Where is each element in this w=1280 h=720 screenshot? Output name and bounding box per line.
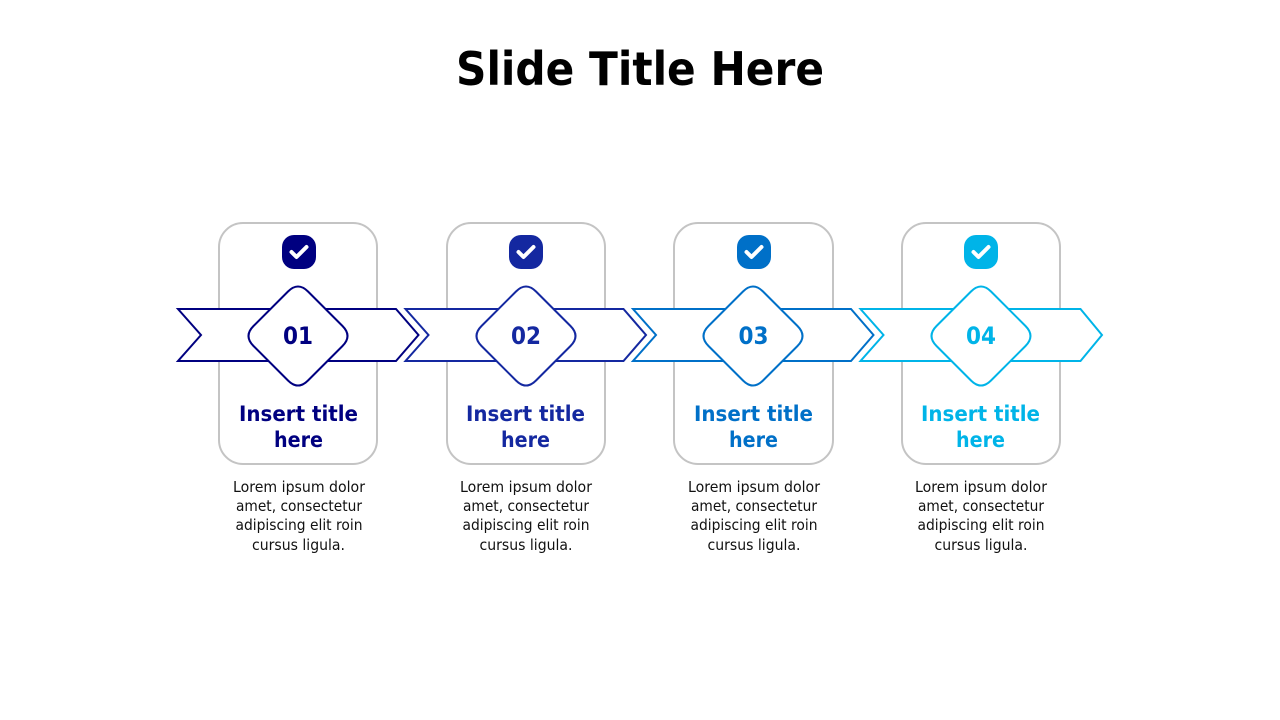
diamond 2 — [476, 286, 576, 386]
body text 1: cursus ligula. — [252, 536, 345, 554]
step 3 group — [688, 235, 821, 554]
body text 2: cursus ligula. — [480, 536, 572, 554]
icon: check badge 4 — [964, 235, 998, 269]
panel: card 4 outline — [902, 223, 1060, 464]
body text 3: amet, consectetur — [691, 497, 818, 515]
body text 2: amet, consectetur — [463, 497, 590, 515]
panel: card 2 outline — [447, 223, 605, 464]
icon: check badge 1 — [282, 235, 316, 269]
diamond 4 — [932, 286, 1030, 386]
title: Slide Title Here — [456, 42, 824, 96]
heading 2: here — [501, 428, 550, 452]
arrow 3 — [633, 309, 874, 361]
body text 3: cursus ligula. — [708, 536, 800, 554]
icon: check badge 2 — [509, 235, 543, 269]
arrow 2 — [406, 309, 646, 361]
panel: card 3 outline — [674, 223, 833, 464]
heading 3: here — [729, 428, 778, 452]
heading 4 — [921, 402, 1040, 452]
heading 2 — [466, 402, 585, 452]
panel: card 1 outline — [219, 223, 377, 464]
diamond 1 — [248, 286, 348, 386]
arrow 1 — [178, 309, 418, 361]
heading 3: Insert title — [694, 402, 813, 426]
arrow 4 — [860, 309, 1102, 361]
body text 1 — [233, 478, 366, 554]
body text 4: cursus ligula. — [934, 536, 1028, 554]
body text 1: Lorem ipsum dolor — [233, 478, 366, 496]
heading 4: here — [956, 428, 1005, 452]
body text 4: adipiscing elit roin — [918, 516, 1044, 534]
heading 1 — [239, 402, 358, 452]
heading 4: Insert title — [921, 402, 1040, 426]
body text 2 — [460, 478, 593, 554]
body text 2: adipiscing elit roin — [462, 516, 590, 534]
diamond 3 — [704, 286, 802, 386]
heading 2: Insert title — [466, 402, 585, 426]
number 04: 04 — [966, 322, 996, 350]
number 01: 01 — [283, 322, 313, 350]
icon: check badge 3 — [737, 235, 771, 269]
heading 1: here — [274, 428, 323, 452]
heading 1: Insert title — [239, 402, 358, 426]
step 2 group — [460, 235, 593, 554]
heading 3 — [694, 402, 813, 452]
step 4 group — [915, 235, 1048, 554]
body text 2: Lorem ipsum dolor — [460, 478, 593, 496]
number 02: 02 — [511, 322, 541, 350]
body text 4 — [915, 478, 1048, 554]
body text 3: adipiscing elit roin — [690, 516, 818, 534]
body text 1: adipiscing elit roin — [236, 516, 362, 534]
step 1 group — [233, 235, 366, 554]
body text 1: amet, consectetur — [236, 497, 363, 515]
body text 4: amet, consectetur — [918, 497, 1045, 515]
body text 3: Lorem ipsum dolor — [688, 478, 821, 496]
number 03: 03 — [738, 322, 768, 350]
body text 4: Lorem ipsum dolor — [915, 478, 1048, 496]
body text 3 — [688, 478, 821, 554]
